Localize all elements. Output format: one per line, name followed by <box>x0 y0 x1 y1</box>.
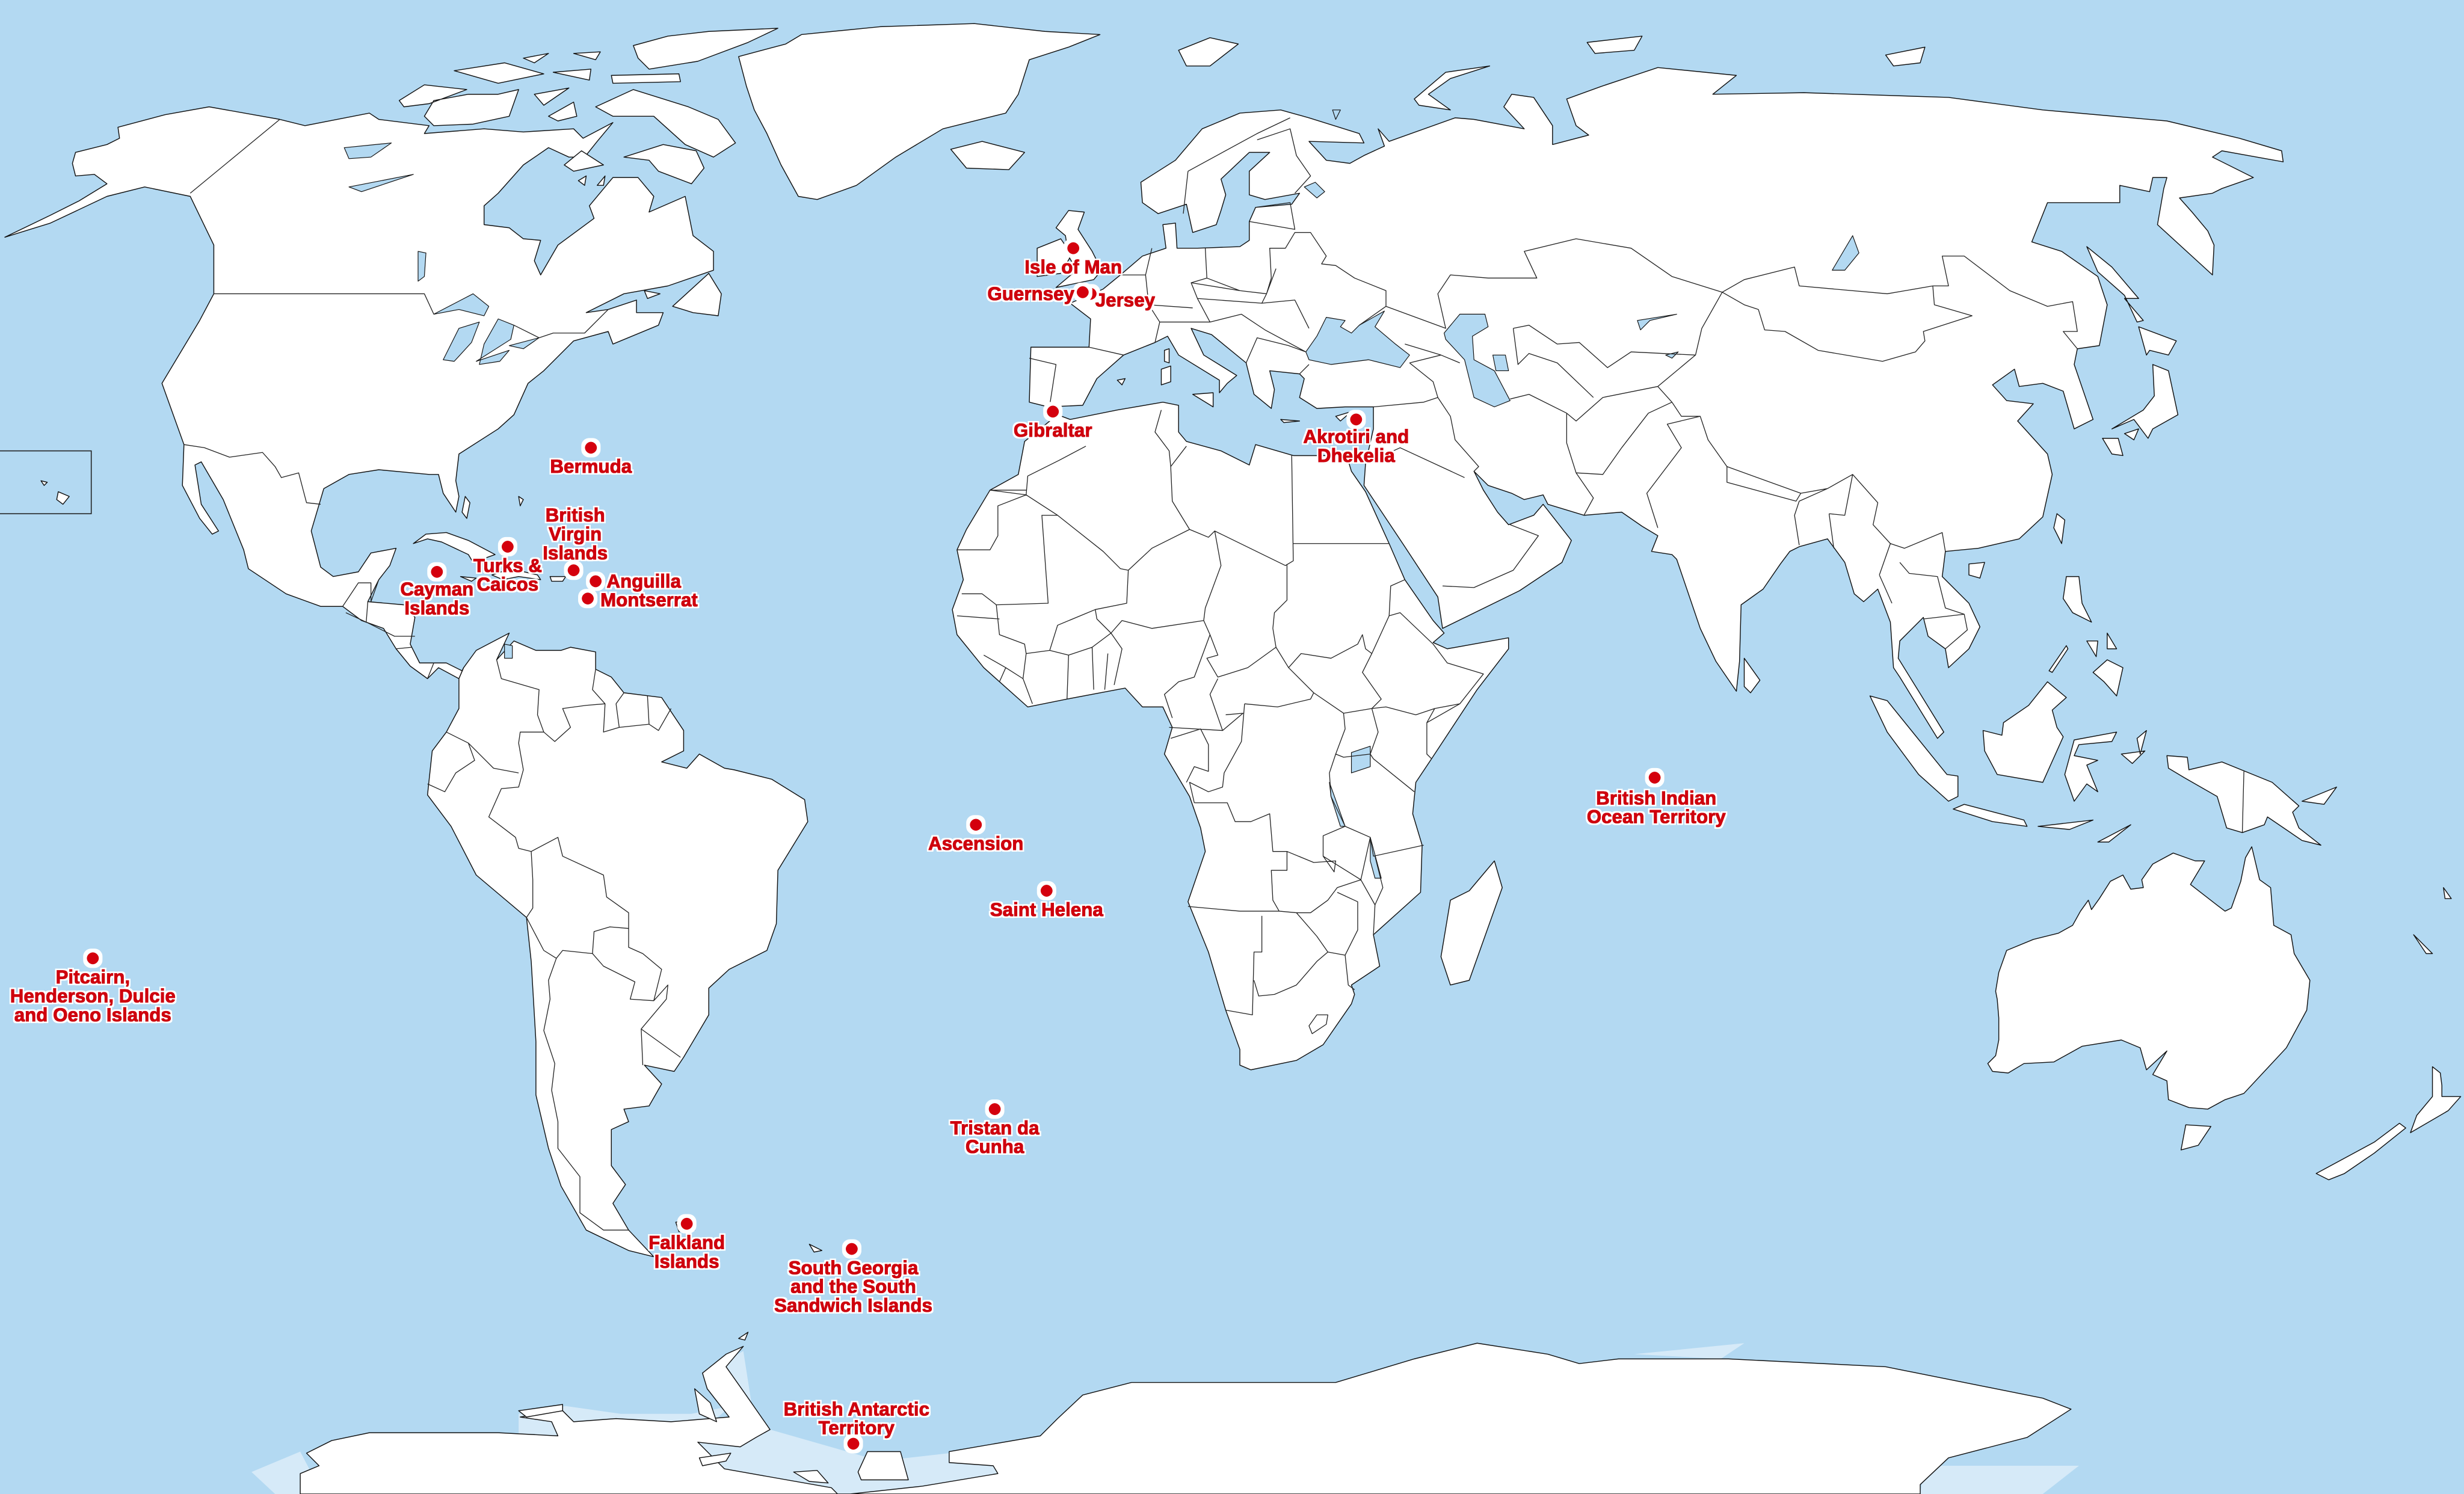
ice shelves <box>251 1343 2079 1494</box>
marker: British Indian Ocean Territory: British Indian <box>1596 787 1716 808</box>
marker: Isle of Man <box>1024 241 1122 277</box>
marker: Cayman Islands: Islands <box>404 597 469 618</box>
marker: South Georgia and the South Sandwich Islands <box>774 1242 932 1316</box>
British Isles <box>1037 211 1101 287</box>
marker: Ascension: Ascension <box>928 833 1023 854</box>
Africa borders <box>957 410 1483 1034</box>
North America <box>5 107 713 678</box>
marker: Falkland Islands <box>648 1217 725 1272</box>
Africa <box>952 402 1509 1070</box>
Canadian lakes <box>344 143 426 281</box>
marker: Tristan da Cunha <box>950 1102 1040 1157</box>
marker: British Indian Ocean Territory <box>1587 770 1726 828</box>
marker: Cayman Islands <box>400 565 473 618</box>
marker: Turks and Caicos: Caicos <box>477 574 538 595</box>
marker: Isle of Man: Isle of Man <box>1024 256 1122 277</box>
ice rises <box>700 1451 908 1483</box>
marker: Bermuda <box>550 441 632 477</box>
marker: Pitcairn, Henderson, Dulcie and Oeno Islands: Henderson, Dulcie <box>10 985 176 1006</box>
Central America borders <box>184 444 434 678</box>
marker: Pitcairn, Henderson, Dulcie and Oeno Islands <box>10 951 176 1025</box>
marker: Pitcairn, Henderson, Dulcie and Oeno Islands: and Oeno Islands <box>14 1004 171 1025</box>
marker: Bermuda: Bermuda <box>550 456 632 477</box>
Peninsula islands <box>519 1332 748 1422</box>
marker: Montserrat: Montserrat <box>600 589 698 610</box>
territory markers and labels <box>10 241 1726 1451</box>
marker: Saint Helena: Saint Helena <box>990 899 1103 920</box>
South America borders <box>428 660 680 1230</box>
Caribbean islands <box>413 496 566 581</box>
mainland Antarctica <box>300 1343 2071 1494</box>
marker: Gibraltar <box>1014 405 1092 441</box>
Great Lakes <box>434 294 539 364</box>
marker: Tristan da Cunha: Cunha <box>966 1136 1024 1157</box>
inland lakes <box>1304 110 1859 370</box>
marker: British Virgin Islands: Islands <box>543 543 608 564</box>
marker: Tristan da Cunha: Tristan da <box>950 1117 1040 1139</box>
Mediterranean islands <box>1117 349 1352 423</box>
Iceland <box>950 141 1024 170</box>
marker: Pitcairn, Henderson, Dulcie and Oeno Islands: Pitcairn, <box>55 967 130 988</box>
marker: British Antarctic Territory: British Antarctic <box>783 1398 929 1419</box>
marker: Akrotiri and Dhekelia: Akrotiri and <box>1303 426 1409 447</box>
marker: British Virgin Islands: British <box>546 505 605 526</box>
country borders <box>190 118 2077 649</box>
marker: South Georgia and the South Sandwich Islands: and the South <box>790 1276 916 1297</box>
South America <box>428 633 808 1257</box>
Canadian Arctic islands <box>399 28 778 316</box>
New Guinea border <box>2243 771 2244 832</box>
marker: Gibraltar: Gibraltar <box>1014 420 1092 441</box>
marker: Anguilla: Anguilla <box>606 571 682 592</box>
marker: British Virgin Islands: Virgin <box>549 524 602 545</box>
Lake Maracaibo <box>505 644 513 658</box>
Falkland Islands and South Georgia <box>676 1219 822 1252</box>
marker: Falkland Islands: Islands <box>654 1251 719 1272</box>
Tasmania and New Zealand <box>2181 1067 2461 1180</box>
Svalbard and Novaya Zemlya <box>1178 36 1925 110</box>
Asia-Pacific islands <box>1745 247 2451 953</box>
Hawaii inset <box>0 451 91 514</box>
marker: Saint Helena <box>990 884 1103 920</box>
marker: Guernsey: Guernsey <box>987 283 1075 304</box>
marker: Falkland Islands: Falkland <box>648 1232 725 1253</box>
Caspian Sea <box>1444 314 1510 407</box>
marker: British Indian Ocean Territory: Ocean Territory <box>1587 807 1726 828</box>
marker: South Georgia and the South Sandwich Islands: South Georgia <box>789 1257 919 1278</box>
Black Sea <box>1306 311 1409 367</box>
marker: British Virgin Islands <box>543 505 608 577</box>
Greenland <box>739 23 1100 200</box>
marker: Akrotiri and Dhekelia <box>1303 413 1409 466</box>
Antarctica <box>251 1332 2079 1494</box>
marker: Cayman Islands: Cayman <box>400 579 473 600</box>
marker: Turks and Caicos <box>473 540 542 595</box>
Australia <box>1988 847 2310 1109</box>
marker: British Antarctic Territory <box>783 1398 929 1451</box>
Madagascar <box>1441 861 1502 985</box>
marker: South Georgia and the South Sandwich Islands: Sandwich Islands <box>774 1295 932 1316</box>
marker: Turks and Caicos: Turks & <box>473 555 542 576</box>
marker: Jersey: Jersey <box>1095 289 1156 310</box>
marker: British Antarctic Territory: Territory <box>818 1418 895 1439</box>
marker: Akrotiri and Dhekelia: Dhekelia <box>1317 445 1395 466</box>
marker: Ascension <box>928 818 1023 854</box>
African lakes <box>1329 746 1381 878</box>
Eurasia <box>1029 67 2283 739</box>
